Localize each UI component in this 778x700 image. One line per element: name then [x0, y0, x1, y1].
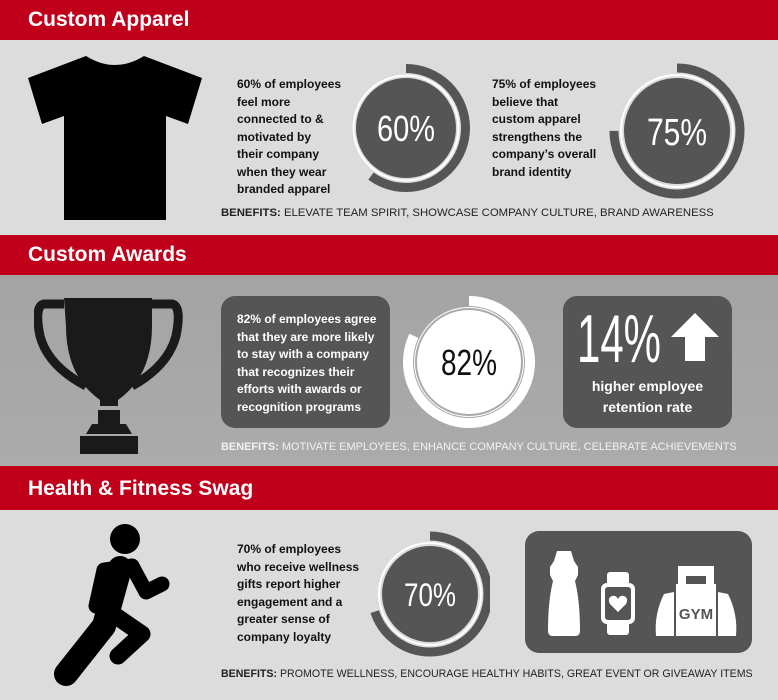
- chart: 60% ring: [352, 64, 470, 192]
- text: 60% stat: motivated by: [237, 130, 311, 144]
- text: 70% stat: greater sense of: [237, 612, 330, 626]
- icon: up arrow: [671, 313, 719, 361]
- icon: smartwatch: [601, 572, 635, 635]
- chart: 75% ring: [610, 64, 744, 198]
- text: 60% stat: their company: [237, 147, 319, 161]
- text box: 82% stat: to stay with a company: [237, 347, 369, 361]
- heading: health & fitness swag: Health & Fitness Swag: [28, 477, 253, 500]
- benefits: apparel: BENEFITS: ELEVATE TEAM SPIRIT, SHOWCASE COMPANY CULTURE, BRAND AWARENESS: [221, 207, 714, 219]
- chart: 70% ring: [370, 532, 490, 656]
- heading: custom apparel: Custom Apparel: [28, 8, 189, 31]
- text: 70% stat: [237, 542, 359, 644]
- text: 75% stat: [492, 77, 596, 178]
- text box: 82% stat: that recognizes their: [237, 364, 354, 378]
- text: 60% stat: [237, 77, 341, 196]
- icon: gym bag: GYM: [679, 606, 713, 623]
- section: custom apparel: [0, 0, 778, 235]
- section: custom awards: [0, 235, 778, 466]
- text: retention label: higher employee: [592, 378, 703, 394]
- text: 70% stat: 70% of employees: [237, 542, 341, 556]
- text: 75% stat: 75% of employees: [492, 77, 596, 91]
- icon: trophy: [34, 298, 183, 454]
- text: 75% stat: custom apparel: [492, 112, 581, 126]
- text box: 82% stat: efforts with awards or: [237, 382, 362, 396]
- icon: t-shirt: [28, 56, 202, 220]
- text box: 82% stat: recognition programs: [237, 400, 361, 414]
- chart: 82% ring: [403, 296, 535, 428]
- benefits: health: BENEFITS: PROMOTE WELLNESS, ENCOURAGE HEALTHY HABITS, GREAT EVENT OR GIVEAWAY ITEMS: [221, 668, 753, 680]
- icon: water bottle: [548, 551, 580, 636]
- panel: wellness items: [525, 531, 752, 653]
- text: 60% stat: 60% of employees: [237, 77, 341, 91]
- benefits: awards: BENEFITS: MOTIVATE EMPLOYEES, ENHANCE COMPANY CULTURE, CELEBRATE ACHIEVEMENTS: [221, 441, 737, 453]
- heading: custom awards: Custom Awards: [28, 243, 187, 266]
- text: retention label: retention rate: [603, 399, 692, 415]
- text: 75% stat: company’s overall: [492, 147, 596, 161]
- icon: gym bag: [656, 566, 736, 636]
- text: 60% stat: feel more: [237, 94, 290, 108]
- text: 75% stat: brand identity: [492, 164, 571, 178]
- text: 60% stat: branded apparel: [237, 182, 330, 196]
- text: 70% stat: who receive wellness: [237, 560, 359, 574]
- text: 60% stat: when they wear: [237, 164, 326, 178]
- heading: custom apparel: [0, 0, 778, 40]
- heading: custom awards: [0, 235, 778, 275]
- text: retention label: [592, 378, 703, 415]
- text: 60% stat: connected to &: [237, 112, 324, 126]
- icon: runner: [54, 524, 170, 686]
- text: 70% stat: engagement and a: [237, 594, 342, 608]
- heading: health & fitness swag: [0, 466, 778, 510]
- section: health & fitness: [0, 466, 778, 700]
- chart: 82% ring: 82%: [441, 342, 497, 383]
- text: 70% stat: gifts report higher: [237, 577, 340, 591]
- chart: 70% ring: 70%: [404, 577, 456, 613]
- text box: 82% stat: that they are more likely: [237, 330, 374, 344]
- text: 70% stat: company loyalty: [237, 630, 331, 644]
- chart: 60% ring: 60%: [377, 108, 435, 149]
- chart: 75% ring: 75%: [647, 112, 707, 154]
- text: 75% stat: believe that: [492, 94, 558, 108]
- text box: 82% stat: [221, 296, 390, 428]
- text box: 82% stat: 82% of employees agree: [237, 312, 376, 326]
- callout: 14% retention: [563, 296, 732, 428]
- text: 75% stat: strengthens the: [492, 130, 582, 144]
